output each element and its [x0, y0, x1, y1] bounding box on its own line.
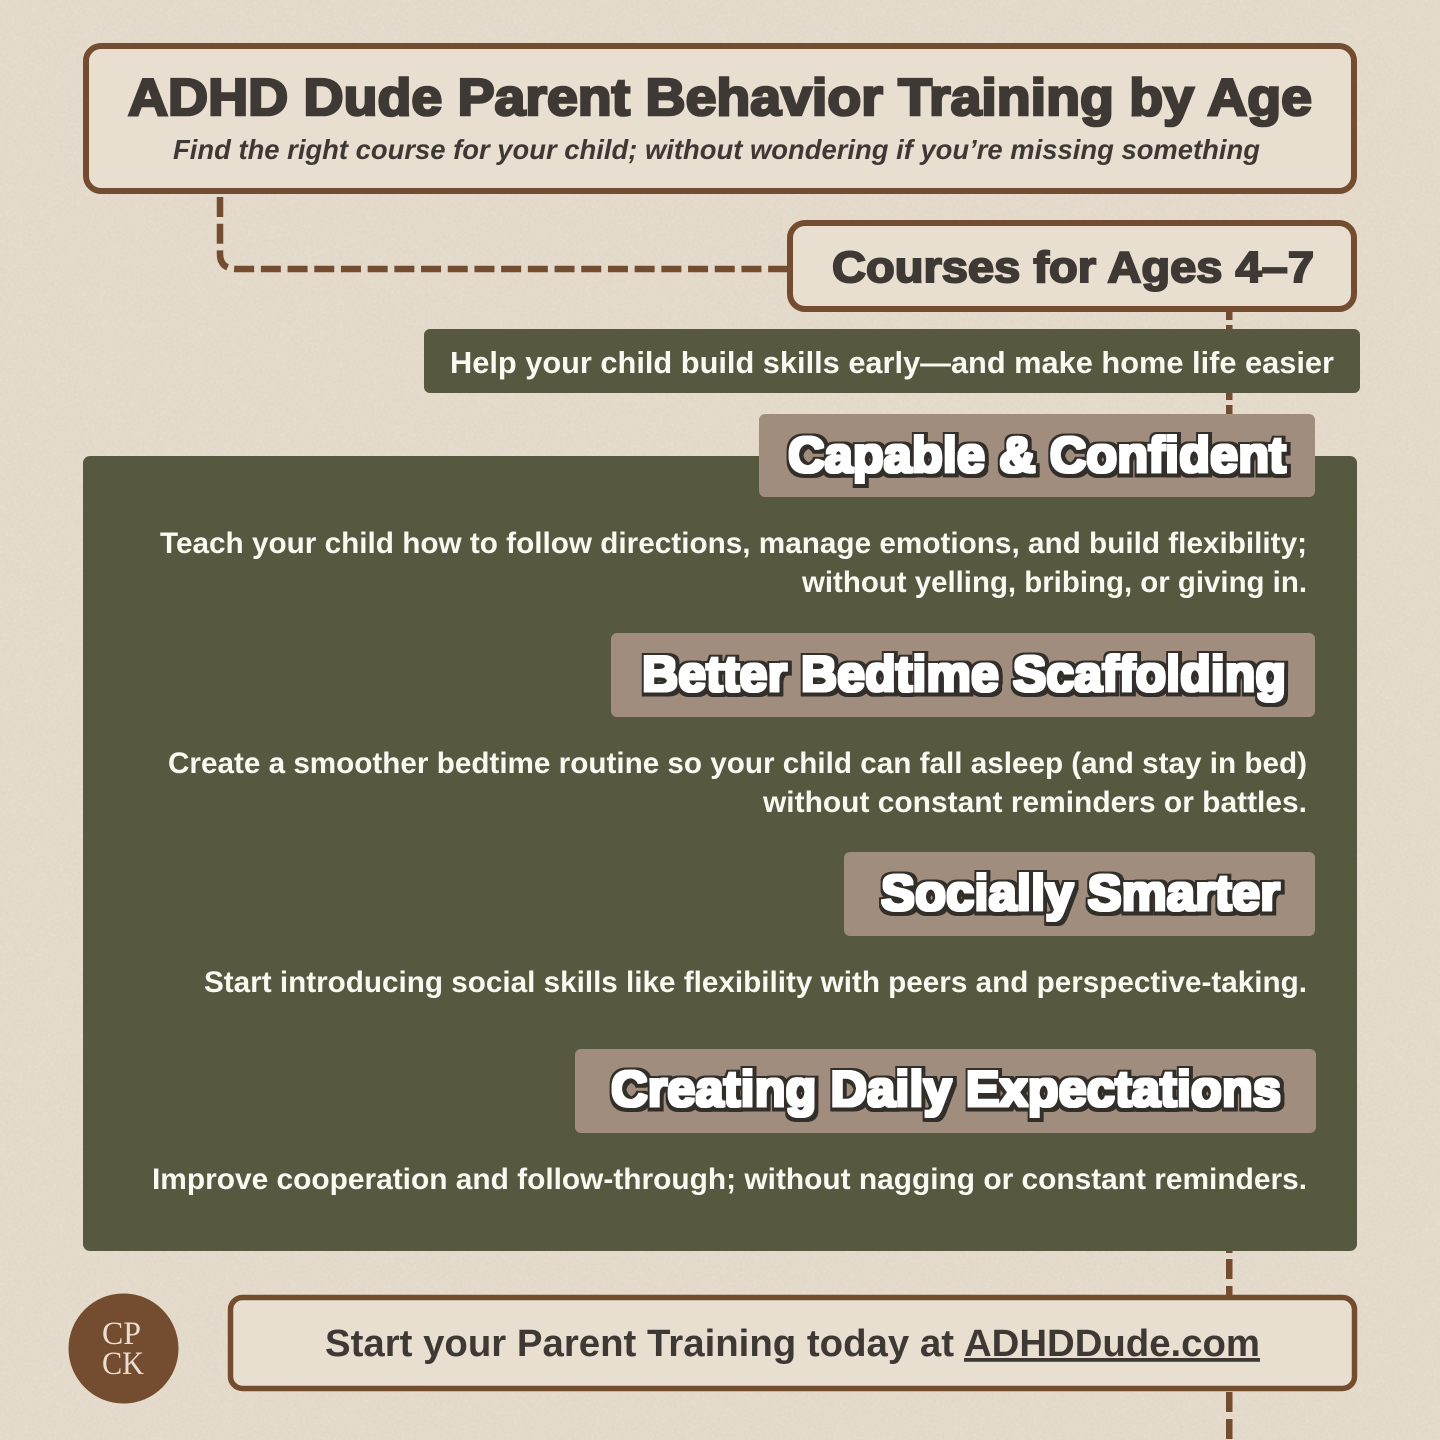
panel: call to action	[230, 1298, 1354, 1388]
logo: CP CK: CP	[102, 1316, 141, 1352]
course description: without yelling, bribing, or giving in.	[801, 566, 1307, 599]
panel: age heading box	[790, 223, 1354, 309]
course description: without constant reminders or battles.	[762, 786, 1307, 819]
course description	[168, 747, 1307, 819]
course description: Improve cooperation and follow-through; without nagging or constant reminders.	[152, 1163, 1307, 1196]
course description: Create a smoother bedtime routine so your child can fall asleep (and stay in bed)	[168, 747, 1307, 780]
panel: course list	[83, 414, 1357, 1251]
course title: Socially Smarter	[881, 865, 1280, 921]
heading: ages: Courses for Ages 4–7	[832, 243, 1314, 292]
course description: Start introducing social skills like flexibility with peers and perspective-taking.	[204, 966, 1307, 999]
title: ADHD Dude Parent Behavior Training by Age	[128, 69, 1312, 127]
call to action text	[325, 1323, 1260, 1365]
course: Capable & Confident	[759, 414, 1315, 497]
panel: title box	[86, 46, 1354, 191]
connector: vertical dashes on the right	[1226, 312, 1232, 1439]
connector: title to courses heading	[220, 197, 787, 269]
course: Creating Daily Expectations	[575, 1049, 1316, 1133]
call to action text: ADHDDude.com	[964, 1323, 1260, 1365]
course title: Capable & Confident	[788, 427, 1286, 483]
logo: CP CK: CK	[102, 1346, 144, 1382]
subtitle: Find the right course for your child; without wondering if you’re missing something	[173, 134, 1260, 165]
course: Socially Smarter	[844, 852, 1315, 936]
course title: Creating Daily Expectations	[611, 1061, 1281, 1117]
course: Better Bedtime Scaffolding	[611, 633, 1315, 717]
banner: early skills	[424, 329, 1360, 393]
call to action text: Start your Parent Training today at	[325, 1323, 954, 1365]
banner text: Help your child build skills early—and make home life easier	[450, 345, 1334, 380]
course title: Better Bedtime Scaffolding	[642, 646, 1286, 702]
course description	[160, 527, 1307, 599]
logo: CP CK	[68, 1294, 178, 1404]
course description: Teach your child how to follow directions, manage emotions, and build flexibility;	[160, 527, 1307, 560]
